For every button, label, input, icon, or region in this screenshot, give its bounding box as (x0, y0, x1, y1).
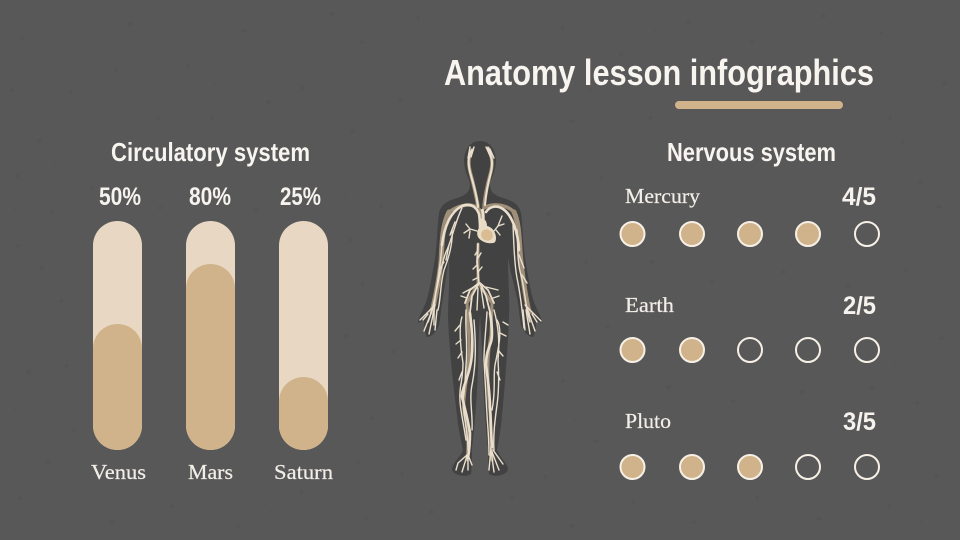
rating: Mercury 4/5 (620, 183, 879, 246)
rating: Pluto 3/5: Pluto (625, 409, 671, 433)
icon: heart (477, 209, 496, 243)
rating: Mercury 4/5: Mercury (625, 184, 701, 208)
bar: Mars 80% (186, 183, 235, 484)
rating: Earth 2/5: 2/5 (843, 292, 876, 320)
title: Anatomy lesson infographics (444, 52, 874, 93)
rating: Earth 2/5 (620, 292, 879, 362)
bar: Saturn 25% (274, 183, 334, 484)
panel: circulatory system (91, 137, 334, 484)
rating: Pluto 3/5 (620, 408, 879, 479)
rating: Mercury 4/5: 4/5 (842, 183, 876, 211)
nerves: pale branches (420, 147, 541, 472)
bar: Saturn 25%: 25% (280, 183, 321, 211)
rating: Pluto 3/5: 3/5 (843, 408, 876, 436)
icon: human body with nerves and heart (418, 141, 542, 476)
body silhouette (418, 141, 542, 476)
bar: Venus 50% (91, 183, 146, 484)
panel: nervous system (620, 137, 879, 479)
heading: nervous system: Nervous system (667, 137, 836, 167)
bar: Venus 50%: 50% (99, 183, 141, 211)
bar: Venus 50%: Venus (91, 460, 146, 484)
heading: circulatory system: Circulatory system (111, 137, 310, 167)
bar: Mars 80%: 80% (189, 183, 231, 211)
title underline (675, 101, 843, 109)
bar: Mars 80%: Mars (188, 460, 233, 484)
bar: Saturn 25%: Saturn (274, 460, 334, 484)
rating: Earth 2/5: Earth (625, 293, 675, 317)
arteries: darker branches (432, 148, 529, 460)
